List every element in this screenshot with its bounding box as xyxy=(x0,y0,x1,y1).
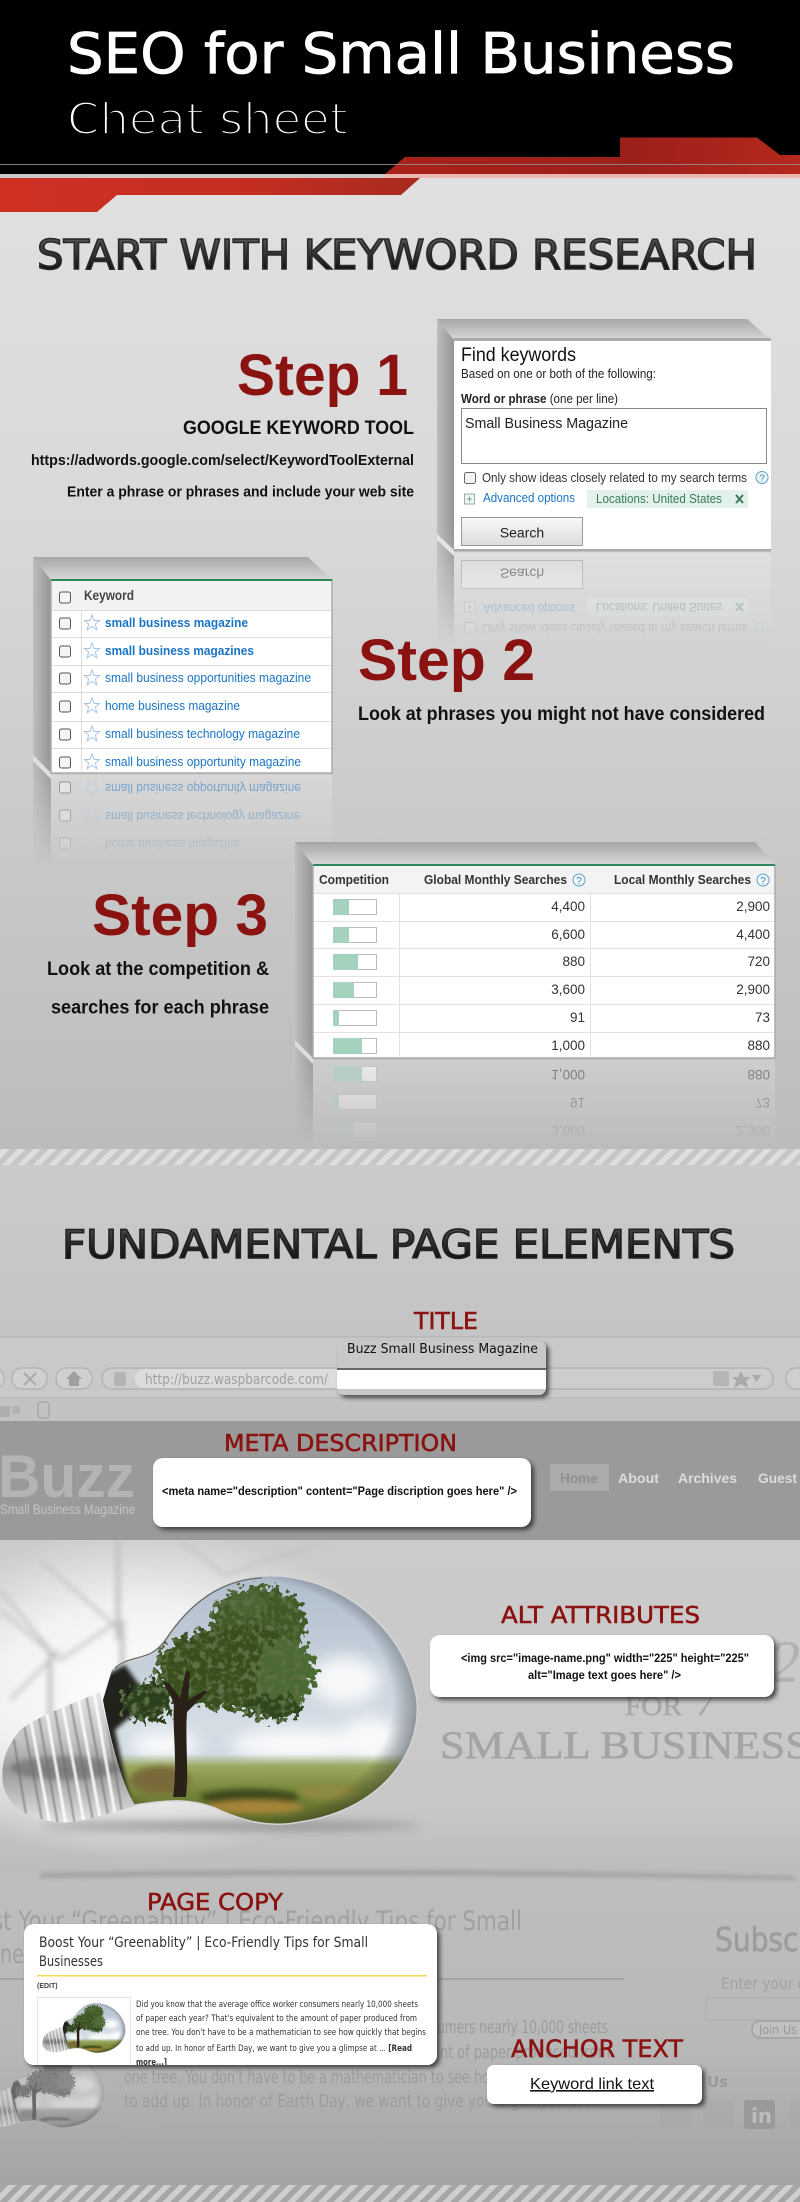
background: blog post screenshot: st Your “Greenablity” | Eco-Friendly Tips for Small xyxy=(0,1906,522,1937)
background: blog post screenshot: umers nearly 10,000 sheets xyxy=(437,2018,608,2038)
subtitle: Cheat sheet xyxy=(67,94,348,145)
heading: start with keyword research: START WITH KEYWORD RESEARCH xyxy=(37,231,757,279)
step 3 text block: Look at the competition & xyxy=(47,959,269,980)
panel: step 3 competition table screenshot: Global Monthly Searches xyxy=(424,872,567,887)
bulb shadow xyxy=(40,1823,420,1829)
icon: faded background bulb xyxy=(0,2052,109,2130)
callout: page copy: Businesses xyxy=(39,1954,103,1970)
background: blog post screenshot: Join Us xyxy=(758,2023,797,2037)
background: blog post screenshot xyxy=(0,1870,800,2185)
website header band screenshot: Guest xyxy=(758,1470,797,1486)
background: image section xyxy=(0,1530,800,1872)
step 2 text block: Look at phrases you might not have considered xyxy=(358,704,765,725)
panel: step 1 keyword tool screenshot xyxy=(437,319,771,761)
icon: wind turbines xyxy=(0,1544,246,1715)
callout: page copy: one tree. You don't have to be a mathematician to see how quickly that begins xyxy=(136,2028,426,2038)
label: anchor text: ANCHOR TEXT xyxy=(511,2035,683,2063)
website header band screenshot xyxy=(0,1421,800,1540)
title: SEO for Small Business xyxy=(67,22,735,87)
icon: browser buttons xyxy=(0,1368,800,1389)
label: meta description: META DESCRIPTION xyxy=(224,1431,457,1457)
panel: step 2 keyword list screenshot xyxy=(33,557,332,958)
callout: meta tag xyxy=(153,1458,531,1527)
step 3 text block: Step 3 xyxy=(92,883,268,948)
callout: page copy: Boost Your “Greenablity” | Eco-Friendly Tips for Small xyxy=(39,1935,368,1951)
panel: step 3 competition table screenshot: ? xyxy=(760,876,766,887)
url text: http://buzz.waspbarcode.com/ xyxy=(145,1372,328,1388)
callout: page copy: to add up. In honor of Earth Day, we want to give you a glimpse at ... [Read xyxy=(136,2044,412,2054)
heading: fundamental page elements: FUNDAMENTAL PAGE ELEMENTS xyxy=(62,1223,735,1268)
background: blog post screenshot: nt of paper produced from xyxy=(440,2043,610,2063)
background magazine text xyxy=(440,1629,800,1767)
website header band screenshot: Buzz xyxy=(0,1443,135,1510)
callout: page copy: more...] xyxy=(136,2058,167,2068)
red ribbon lower xyxy=(0,178,420,212)
background: blog post screenshot: in xyxy=(751,2104,772,2128)
background: keyword research section xyxy=(0,175,800,1150)
callout: page copy: of paper each year? That's equivalent to the amount of paper produced from xyxy=(136,2014,417,2024)
callout: page copy: (EDIT) xyxy=(37,1983,58,1990)
step 1 text block: https://adwords.google.com/select/KeywordToolExternal xyxy=(31,452,414,469)
callout: image tag xyxy=(430,1635,774,1697)
red ribbon upper xyxy=(385,138,800,174)
panel: step 3 competition table screenshot: Competition xyxy=(319,872,389,887)
background magazine text: SMALL BUSINESS xyxy=(440,1724,800,1767)
callout: meta tag: <meta name="description" content="Page discription goes here" /> xyxy=(162,1484,517,1498)
callout: image tag: <img src="image-name.png" width="225" height="225" xyxy=(461,1651,749,1665)
panel: step 2 keyword list screenshot: Keyword xyxy=(84,588,134,603)
step 3 text block: searches for each phrase xyxy=(51,998,269,1018)
background magazine text: FOR xyxy=(625,1691,682,1721)
callout: title tag xyxy=(337,1341,546,1395)
website header band screenshot: Home xyxy=(560,1470,598,1486)
background: blog post screenshot: one tree. You don't have to be a mathematician to see how xyxy=(124,2068,500,2088)
background: blog post screenshot: more...] xyxy=(124,2118,180,2138)
browser chrome screenshot xyxy=(0,1337,800,1421)
striped divider xyxy=(0,1149,800,1165)
step 1 text block: Step 1 xyxy=(237,343,408,408)
callout: anchor text xyxy=(487,2065,702,2104)
background: page elements section xyxy=(0,1165,800,1337)
background magazine text: 7 xyxy=(696,1676,720,1725)
label: title: TITLE xyxy=(413,1309,478,1335)
striped footer xyxy=(0,2185,800,2202)
callout: page copy: Did you know that the average office worker consumers nearly 10,000 sheets xyxy=(136,2000,418,2010)
step 1 text block: GOOGLE KEYWORD TOOL xyxy=(183,418,414,439)
icon: thumbnail bulb xyxy=(42,2002,128,2054)
step 2 text block: Step 2 xyxy=(358,628,535,693)
label: page copy: PAGE COPY xyxy=(147,1890,284,1916)
callout: title tag: Buzz Small Business Magazine xyxy=(347,1341,538,1357)
label: alt attributes: ALT ATTRIBUTES xyxy=(501,1603,700,1629)
website header band screenshot: Small Business Magazine xyxy=(0,1501,135,1517)
header banner xyxy=(0,0,800,212)
background: blog post screenshot: ne xyxy=(0,1939,24,1970)
panel: step 3 competition table screenshot: Local Monthly Searches xyxy=(614,872,751,887)
background magazine text: 2 xyxy=(770,1629,800,1695)
step 2 text block xyxy=(358,628,765,725)
panel: step 3 competition table screenshot: ? xyxy=(576,876,582,887)
background: blog post screenshot: to add up. In honor of Earth Day, we want to give you a glimpse at ... xyxy=(124,2092,600,2112)
step 1 text block xyxy=(31,343,414,500)
callout: anchor text: Keyword link text xyxy=(530,2076,655,2093)
website header band screenshot: Archives xyxy=(678,1470,737,1486)
step 3 text block xyxy=(47,883,269,1018)
panel: step 3 competition table screenshot xyxy=(295,842,775,1221)
background: blog post screenshot: Us xyxy=(707,2073,728,2091)
website header band screenshot: About xyxy=(618,1470,659,1486)
callout: page copy xyxy=(24,1924,437,2068)
callout: image tag: alt="Image text goes here" /> xyxy=(528,1668,681,1682)
icon: light bulb with tree xyxy=(0,1570,430,1831)
step 1 text block: Enter a phrase or phrases and include your web site xyxy=(67,484,414,500)
